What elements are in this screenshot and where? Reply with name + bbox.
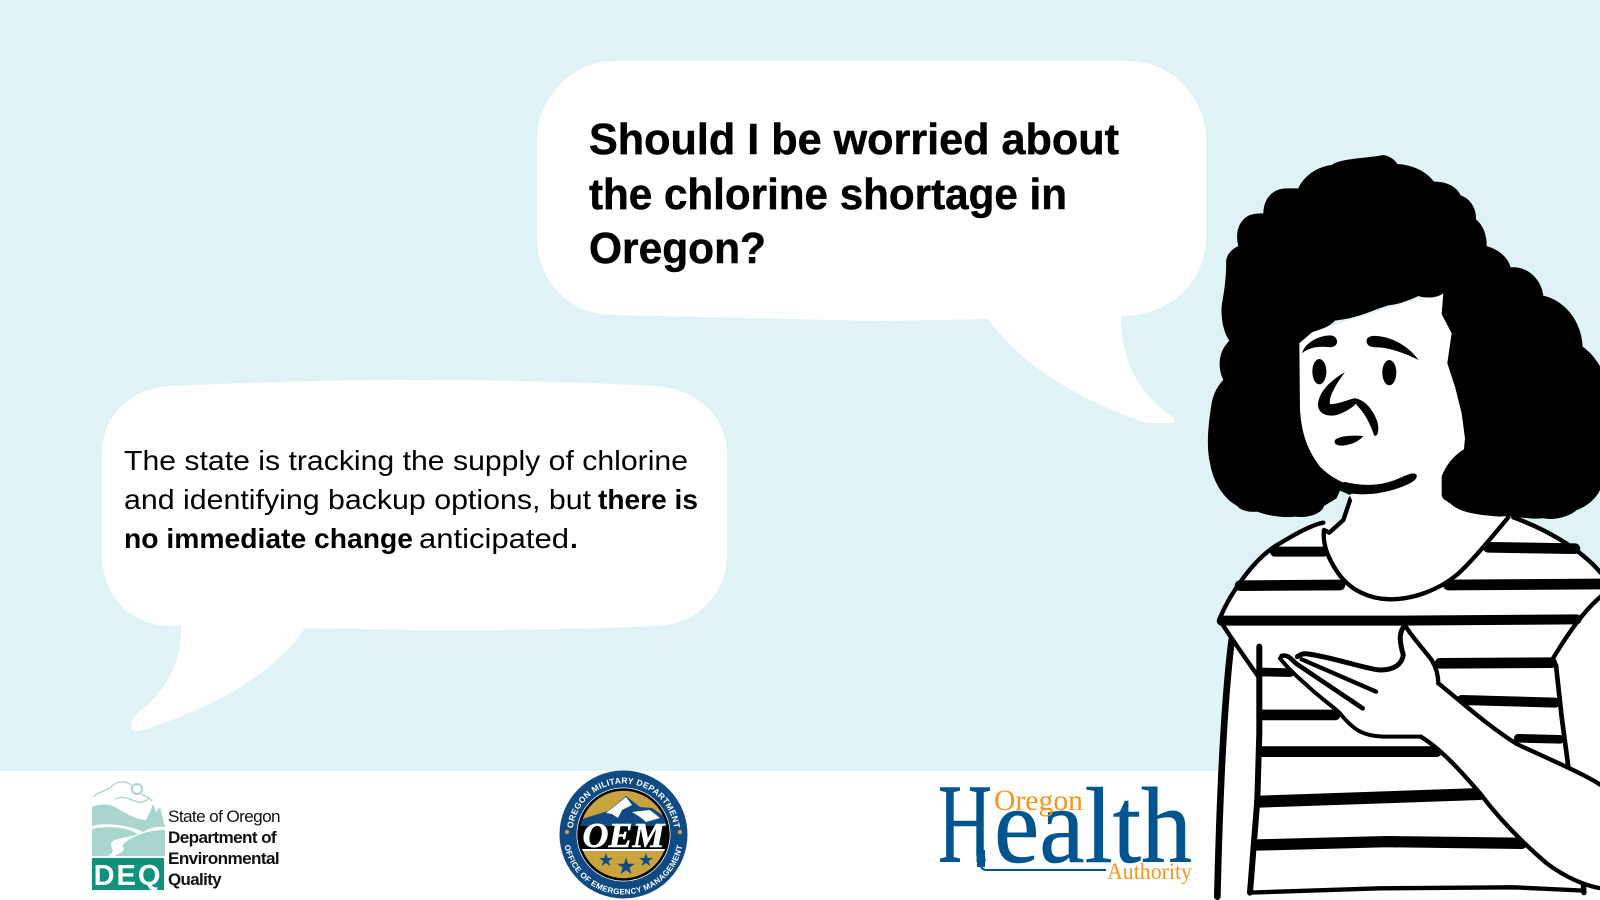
hair (1208, 155, 1600, 519)
DEQ wordmark: Environmental (168, 850, 279, 868)
icon: seal stars: ★ (598, 850, 614, 870)
neck and collar (1324, 498, 1508, 599)
question speech bubble (537, 61, 1206, 423)
icon: seal stars: ★ (616, 853, 636, 879)
DEQ wordmark: State of Oregon (168, 808, 280, 826)
question heading: the chlorine shortage in (589, 170, 1067, 219)
answer text: The state is tracking the supply of chlorine (124, 445, 688, 476)
arm outline (1280, 627, 1600, 888)
face features (1302, 335, 1419, 494)
hand and arm (1279, 627, 1600, 888)
answer text: no immediate change (124, 523, 413, 554)
OEM seal (560, 770, 688, 898)
answer speech bubble (102, 380, 727, 731)
character: worried woman (1208, 155, 1600, 900)
shirt stripes (1222, 547, 1600, 845)
question heading (589, 115, 1119, 273)
Health wordmark: ealth (994, 767, 1192, 886)
face skin (1297, 290, 1470, 503)
question heading: Should I be worried about (589, 115, 1119, 164)
body and shirt (1217, 497, 1600, 900)
Oregon Health Authority logo (938, 762, 1192, 887)
answer text (124, 445, 698, 554)
DEQ badge: DEQ (94, 860, 162, 892)
answer text: . (570, 523, 578, 554)
icon: DEQ landscape (92, 782, 165, 856)
seal ring text: OREGON MILITARY DEPARTMENT (567, 778, 680, 828)
Health wordmark: H (938, 762, 992, 887)
DEQ wordmark (168, 808, 280, 889)
DEQ logo (92, 782, 280, 892)
answer text: there is (598, 484, 698, 515)
icon: seal stars (598, 850, 654, 879)
seal ring text (565, 778, 682, 894)
shirt outline (1217, 517, 1600, 897)
DEQ wordmark: Department of (168, 829, 277, 847)
hair and face (1208, 155, 1600, 519)
DEQ wordmark: Quality (168, 871, 222, 889)
Authority wordmark: Authority (1107, 859, 1192, 884)
question heading: Oregon? (589, 224, 766, 273)
answer text: anticipated (419, 523, 569, 554)
icon: seal stars: ★ (638, 850, 654, 870)
answer text: and identifying backup options, but (124, 484, 591, 515)
Oregon wordmark: Oregon (994, 784, 1083, 817)
OEM initials: OEM (582, 816, 666, 855)
seal ring text: OFFICE OF EMERGENCY MANAGEMENT (565, 844, 682, 894)
